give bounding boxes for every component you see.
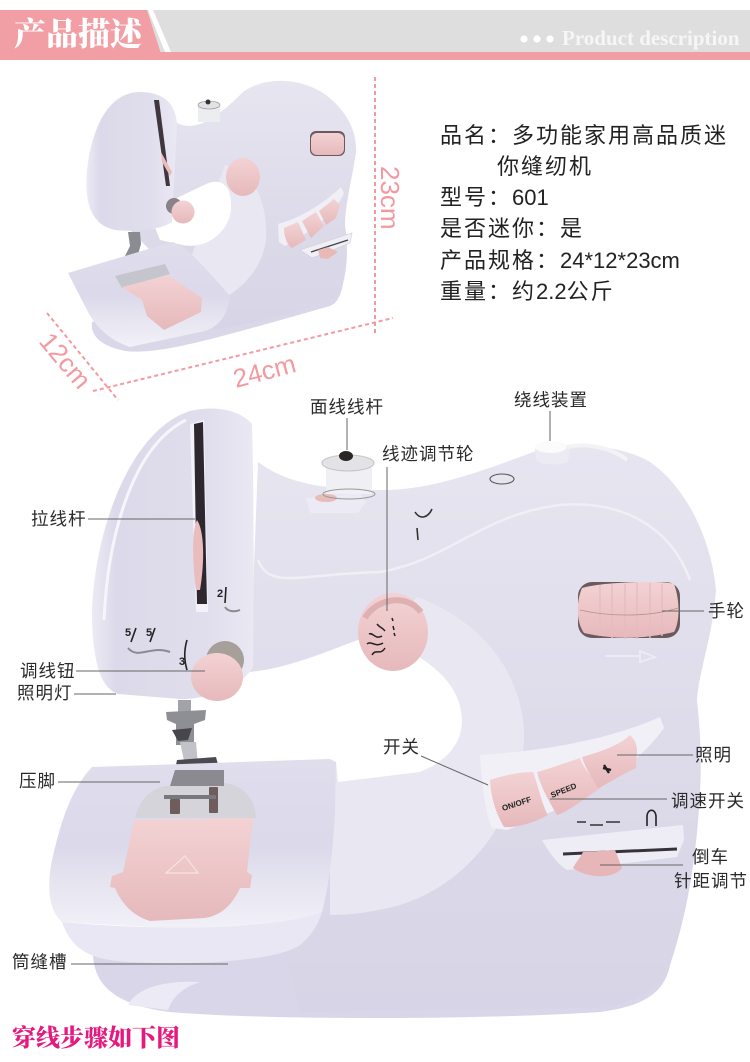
small table bbox=[68, 242, 230, 347]
leader bbox=[71, 963, 228, 965]
small spool bbox=[198, 100, 220, 122]
wheel face bbox=[578, 582, 678, 638]
bulb icon bbox=[603, 765, 611, 773]
slider frame bbox=[542, 825, 684, 870]
spec product name: 品名：多功能家用高品质迷 bbox=[440, 123, 728, 148]
wheel seam bbox=[580, 608, 678, 615]
small slider groove bbox=[311, 240, 348, 252]
label: 拉线杆 bbox=[31, 509, 86, 529]
dial rim bbox=[358, 593, 428, 671]
small sewing machine photo bbox=[68, 81, 356, 352]
dial stitch marks bbox=[367, 618, 395, 655]
stitch pattern marks bbox=[577, 822, 620, 825]
head housing bbox=[92, 409, 254, 699]
right feed dog bbox=[209, 787, 218, 813]
leader bbox=[346, 418, 348, 450]
header title: 产品描述 bbox=[14, 16, 145, 52]
feed dogs bbox=[164, 787, 218, 814]
guide 5: 5 bbox=[125, 627, 131, 639]
thread slot bbox=[190, 420, 208, 612]
footer heading: 穿线步骤如下图 bbox=[12, 1024, 180, 1052]
width label: 24cm bbox=[230, 348, 299, 394]
cover arrow mark bbox=[166, 856, 198, 873]
leader bbox=[76, 670, 205, 672]
small thread slot bbox=[154, 100, 170, 186]
needle clamp bbox=[166, 710, 206, 745]
header pink tab bbox=[0, 10, 163, 60]
small stitch slider bbox=[300, 233, 352, 259]
small spool pin bbox=[206, 100, 210, 104]
spool top disc bbox=[322, 455, 374, 471]
spool bbox=[306, 451, 375, 513]
label: 手轮 bbox=[708, 601, 745, 621]
small spool thread bbox=[198, 106, 220, 122]
winder icon bbox=[490, 474, 514, 484]
spool thread bbox=[326, 464, 372, 494]
callout: hand wheel bbox=[662, 601, 745, 621]
label: 压脚 bbox=[19, 771, 56, 791]
small take-up lever bbox=[161, 152, 172, 176]
small machine throat bbox=[150, 182, 231, 246]
small hand wheel bbox=[310, 131, 345, 156]
label reverse: 倒车 bbox=[692, 847, 729, 867]
callout: reverse and stitch length bbox=[600, 847, 748, 891]
small panel frame bbox=[278, 187, 344, 246]
label: 线迹调节轮 bbox=[382, 444, 474, 464]
presser foot body bbox=[170, 770, 224, 786]
small slider tab bbox=[318, 247, 338, 259]
dial ribbed edge bbox=[365, 600, 421, 618]
guide 5 prime: 5 bbox=[146, 627, 152, 639]
button panel bbox=[480, 717, 664, 830]
small machine base bbox=[92, 250, 345, 352]
small machine body bbox=[130, 81, 356, 330]
tension knob bbox=[191, 641, 244, 701]
spec size: 产品规格：24*12*23cm bbox=[440, 248, 680, 273]
thread guide arrows bbox=[131, 587, 226, 670]
winder cap bbox=[535, 441, 567, 453]
tension knob cap bbox=[191, 653, 243, 701]
foot toes bbox=[164, 795, 216, 799]
label: 开关 bbox=[383, 737, 420, 757]
direction arrow bbox=[605, 651, 655, 662]
spool base bbox=[306, 493, 366, 513]
slider tab bbox=[573, 850, 622, 876]
button speed bbox=[537, 758, 602, 815]
needle screw bbox=[172, 728, 192, 741]
header english caption: Product description bbox=[562, 26, 740, 50]
spec weight: 重量：约2.2公斤 bbox=[440, 279, 615, 304]
wheel recess bbox=[578, 582, 680, 638]
leader bbox=[617, 754, 693, 756]
thread guide icon bbox=[415, 509, 432, 540]
needle shank bbox=[180, 742, 198, 770]
inner arm light area bbox=[330, 597, 524, 915]
spool lower flange bbox=[323, 489, 375, 499]
small needle plate bbox=[115, 264, 170, 288]
label: 筒缝槽 bbox=[12, 952, 68, 972]
stitch dial bbox=[358, 593, 428, 671]
dimension: depth bbox=[33, 313, 118, 400]
callout: spool pin bbox=[310, 397, 384, 450]
small wheel recess bbox=[310, 131, 345, 156]
button speed label: SPEED bbox=[549, 781, 578, 800]
bobbin winder bbox=[535, 441, 627, 464]
label stitch length: 针距调节 bbox=[674, 871, 748, 891]
needle plate bbox=[135, 783, 256, 818]
header dots bbox=[520, 35, 554, 43]
label: 绕线装置 bbox=[514, 390, 588, 410]
header banner bbox=[0, 10, 750, 60]
main sewing machine photo bbox=[49, 409, 716, 1018]
upper arm contour bbox=[258, 504, 690, 580]
specification text bbox=[440, 123, 728, 304]
needle bar bbox=[178, 700, 191, 712]
guide 3: 3 bbox=[179, 656, 185, 668]
button on/off bbox=[490, 772, 548, 827]
leader bbox=[550, 798, 667, 800]
callouts bbox=[12, 390, 748, 972]
label: 照明 bbox=[695, 745, 732, 765]
small spool disc bbox=[198, 101, 220, 109]
callout: bobbin winder bbox=[514, 390, 588, 441]
label: 面线线杆 bbox=[310, 397, 384, 417]
slot opening bbox=[194, 422, 207, 604]
leader bbox=[600, 864, 683, 866]
callout: switch bbox=[383, 737, 488, 785]
wheel ribs bbox=[600, 583, 662, 639]
base highlight bbox=[128, 982, 200, 1010]
depth label: 12cm bbox=[33, 327, 97, 395]
slider groove bbox=[563, 849, 677, 854]
small button panel bbox=[278, 187, 344, 248]
head edge highlight bbox=[104, 420, 186, 620]
spool pin bbox=[339, 451, 353, 461]
leader bbox=[74, 693, 116, 695]
pink bobbin cover bbox=[110, 818, 253, 921]
winder post bbox=[535, 442, 570, 464]
tension knob collar bbox=[206, 641, 244, 679]
slot frame bbox=[190, 420, 208, 612]
leader bbox=[549, 411, 551, 441]
guide 2: 2 bbox=[217, 588, 223, 600]
machine body bbox=[240, 446, 716, 1012]
spec model: 型号：601 bbox=[440, 185, 549, 210]
small button light bbox=[319, 199, 340, 225]
small slider frame bbox=[300, 233, 352, 258]
small tension knob bbox=[166, 198, 194, 224]
callout: light button bbox=[617, 745, 732, 765]
take-up lever bbox=[193, 520, 203, 590]
table lower lip bbox=[62, 912, 322, 963]
leader bbox=[386, 467, 388, 611]
leader bbox=[58, 781, 160, 783]
winder band bbox=[568, 445, 627, 460]
stitch slider bbox=[542, 825, 684, 876]
leader bbox=[662, 610, 704, 612]
header white slash bbox=[148, 10, 171, 52]
thread guide hooks bbox=[128, 607, 240, 653]
callout: light bbox=[17, 683, 116, 703]
button on/off label: ON/OFF bbox=[501, 795, 532, 813]
small machine inner light area bbox=[190, 165, 266, 298]
leader bbox=[88, 518, 195, 520]
header pink stripe bbox=[0, 52, 750, 60]
leader bbox=[421, 756, 488, 785]
left feed dog bbox=[170, 799, 180, 814]
small pink cover bbox=[122, 275, 202, 330]
small wheel bbox=[311, 133, 344, 155]
base plate bbox=[93, 950, 672, 1018]
panel frame bbox=[480, 717, 664, 830]
label: 照明灯 bbox=[17, 683, 72, 703]
small stitch dial bbox=[226, 158, 260, 196]
small needle foot bbox=[124, 232, 141, 266]
presser foot assembly bbox=[166, 700, 223, 785]
label: 调线钮 bbox=[20, 661, 76, 681]
width dashed line bbox=[93, 318, 393, 391]
header grey band bbox=[0, 10, 750, 52]
hand wheel bbox=[578, 582, 680, 639]
spec product name line two: 你缝纫机 bbox=[497, 154, 593, 179]
button light bbox=[582, 735, 637, 788]
small machine head bbox=[86, 92, 177, 231]
extension table bbox=[49, 759, 336, 930]
small button speed bbox=[302, 212, 324, 238]
thread guide numbers bbox=[125, 588, 223, 668]
small button on/off bbox=[284, 222, 306, 248]
depth dashed line bbox=[47, 313, 118, 400]
reverse icon bbox=[647, 810, 656, 826]
spec mini: 是否迷你：是 bbox=[440, 216, 584, 241]
small knob collar bbox=[166, 198, 182, 214]
small knob cap bbox=[172, 200, 194, 224]
spool felt bbox=[315, 494, 337, 502]
throat opening bbox=[100, 640, 462, 782]
presser foot bbox=[172, 757, 223, 785]
height dashed line bbox=[374, 77, 376, 335]
label: 调速开关 bbox=[671, 791, 745, 811]
height label: 23cm bbox=[375, 166, 405, 230]
dimension: width bbox=[93, 318, 393, 394]
